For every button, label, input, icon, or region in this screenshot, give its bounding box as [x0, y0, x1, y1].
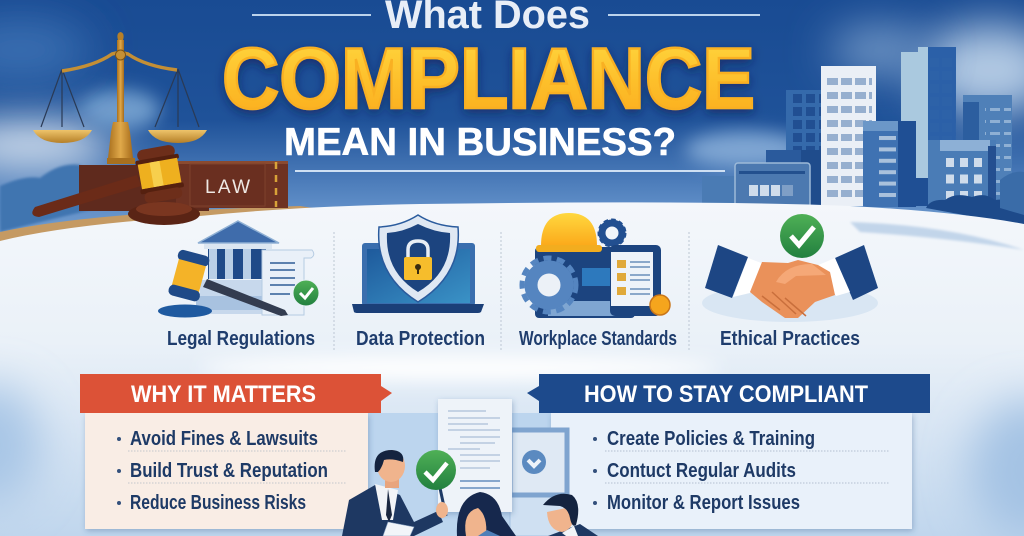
bullet list: Monitor & Report Issues: [607, 492, 800, 514]
title rule lines: [252, 15, 760, 171]
bullet list: Create Policies & Training: [607, 428, 815, 450]
banner heading: HOW TO STAY COMPLIANT: [584, 381, 868, 408]
icon: green check sign: [416, 450, 456, 490]
bullet list: Reduce Business Risks: [130, 492, 306, 514]
ground: tan strip and pale foreground: [0, 202, 1024, 536]
man on right: [543, 494, 598, 536]
icon: document page: [438, 399, 512, 512]
dividers: [334, 232, 689, 350]
panel body: [85, 413, 368, 529]
man with check sign: [342, 450, 456, 536]
icon: small gear: [599, 220, 625, 246]
center scene: documents and business team: [342, 399, 598, 536]
panel: how to stay compliant: [527, 374, 930, 529]
icon: shield: [379, 215, 458, 302]
label: Workplace Standards: [519, 328, 677, 350]
icon: wooden gavel: [32, 144, 200, 225]
bullet list: [117, 428, 328, 514]
label: Data Protection: [356, 328, 485, 350]
title line: COMPLIANCE: COMPLIANCE: [222, 31, 755, 127]
category: workplace standards: [519, 213, 677, 350]
icon: green check: [293, 280, 319, 306]
bullet list: [593, 428, 815, 514]
label: Legal Regulations: [167, 328, 315, 350]
blue banner: [527, 374, 930, 413]
title: [222, 0, 760, 171]
panel body: [551, 413, 912, 529]
panel: why it matters: [80, 374, 392, 529]
city skyline: [702, 47, 1024, 226]
center scene background: [368, 413, 551, 536]
banner heading: WHY IT MATTERS: [131, 381, 316, 408]
icon: hard hat: [536, 213, 602, 252]
icon: law book: [79, 161, 288, 211]
bullet list: Build Trust & Reputation: [130, 460, 328, 482]
icon: gavel: [158, 249, 288, 318]
category: data protection: [352, 215, 485, 350]
icon: document scroll: [262, 250, 314, 315]
woman: [457, 492, 516, 536]
category: legal regulations: [158, 221, 319, 350]
icon: padlock: [404, 241, 432, 280]
icon: laptop: [352, 243, 484, 313]
icon: scales of justice: [33, 32, 207, 164]
icon: monitor: [535, 247, 635, 318]
bullet list: Avoid Fines & Lawsuits: [130, 428, 318, 450]
icon: checklist clipboard: [610, 245, 661, 316]
title line: MEAN IN BUSINESS?: MEAN IN BUSINESS?: [284, 121, 676, 164]
icon: orange seal: [650, 295, 670, 315]
background sky: [0, 0, 1024, 240]
label: Ethical Practices: [720, 328, 860, 350]
category: ethical practices: [702, 214, 878, 350]
red banner: [80, 374, 392, 413]
icon: green check: [780, 214, 824, 258]
bullet list: Contuct Regular Audits: [607, 460, 796, 482]
icon: courthouse: [196, 221, 286, 314]
icon: handshake: [702, 245, 878, 322]
icon: shield card: [510, 430, 567, 536]
book label: LAW: [205, 177, 250, 198]
icon: large gear: [522, 258, 576, 312]
